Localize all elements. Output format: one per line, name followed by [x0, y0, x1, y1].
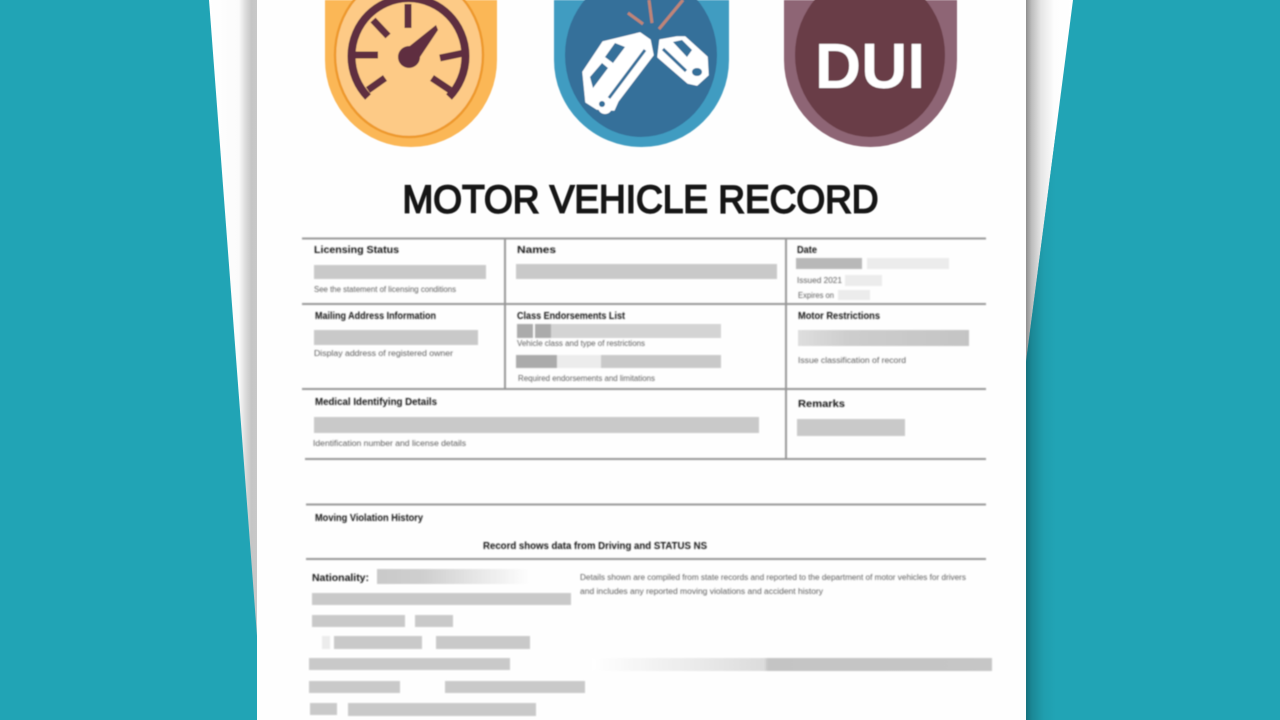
icons row — [325, 0, 957, 147]
field: motor restrictions: Motor Restrictions — [798, 311, 880, 322]
field: remarks — [797, 399, 905, 436]
icon: speedometer badge — [325, 0, 497, 147]
field: class endorsements: Class Endorsements List — [517, 311, 626, 322]
field: medical identifying — [313, 397, 759, 448]
title: MOTOR VEHICLE RECORD — [402, 178, 878, 222]
field: class endorsements: Vehicle class and type of restrictions — [517, 339, 645, 348]
history description text — [580, 573, 966, 596]
history description text: Details shown are compiled from state records and reported to the department of motor vehicles for drivers — [580, 573, 966, 582]
section heading: Moving Violation History — [315, 513, 423, 524]
field: name: Names — [517, 245, 557, 256]
field: date — [796, 245, 949, 300]
icon: DUI badge: DUI — [815, 30, 925, 102]
field: mailing address: Mailing Address Information — [315, 311, 436, 322]
history redacted bars — [309, 569, 992, 716]
violation history section — [306, 504, 992, 716]
field: remarks: Remarks — [798, 399, 845, 410]
back sheet right — [1026, 0, 1073, 362]
field: mailing address: Display address of registered owner — [314, 349, 453, 358]
field: date: Date — [797, 245, 817, 256]
section subheading: Record shows data from Driving and STATUS NS — [483, 541, 707, 552]
record table — [302, 238, 986, 459]
icon: car crash badge — [554, 0, 729, 147]
field: name — [516, 245, 777, 279]
history description text: and includes any reported moving violations and accident history — [580, 587, 823, 596]
main document page — [257, 0, 1026, 720]
field: mailing address — [314, 311, 478, 358]
field: licensing status: See the statement of licensing conditions — [314, 285, 456, 294]
field: date: Expires on — [798, 291, 834, 300]
field: class endorsements: Required endorsements and limitations — [518, 374, 655, 383]
field: date: Issued 2021 — [797, 276, 843, 285]
field: licensing status: Licensing Status — [314, 245, 399, 256]
field: class endorsements — [516, 311, 721, 383]
field: motor restrictions — [798, 311, 969, 365]
field: licensing status — [314, 245, 486, 294]
field: motor restrictions: Issue classification of record — [798, 356, 906, 365]
page edge shadow right — [1026, 131, 1056, 720]
field: medical identifying: Medical Identifying Details — [315, 397, 437, 408]
back sheet left — [209, 0, 257, 636]
icon: DUI badge — [784, 0, 957, 147]
history label: Nationality: — [312, 573, 369, 584]
field: medical identifying: Identification number and license details — [313, 439, 466, 448]
